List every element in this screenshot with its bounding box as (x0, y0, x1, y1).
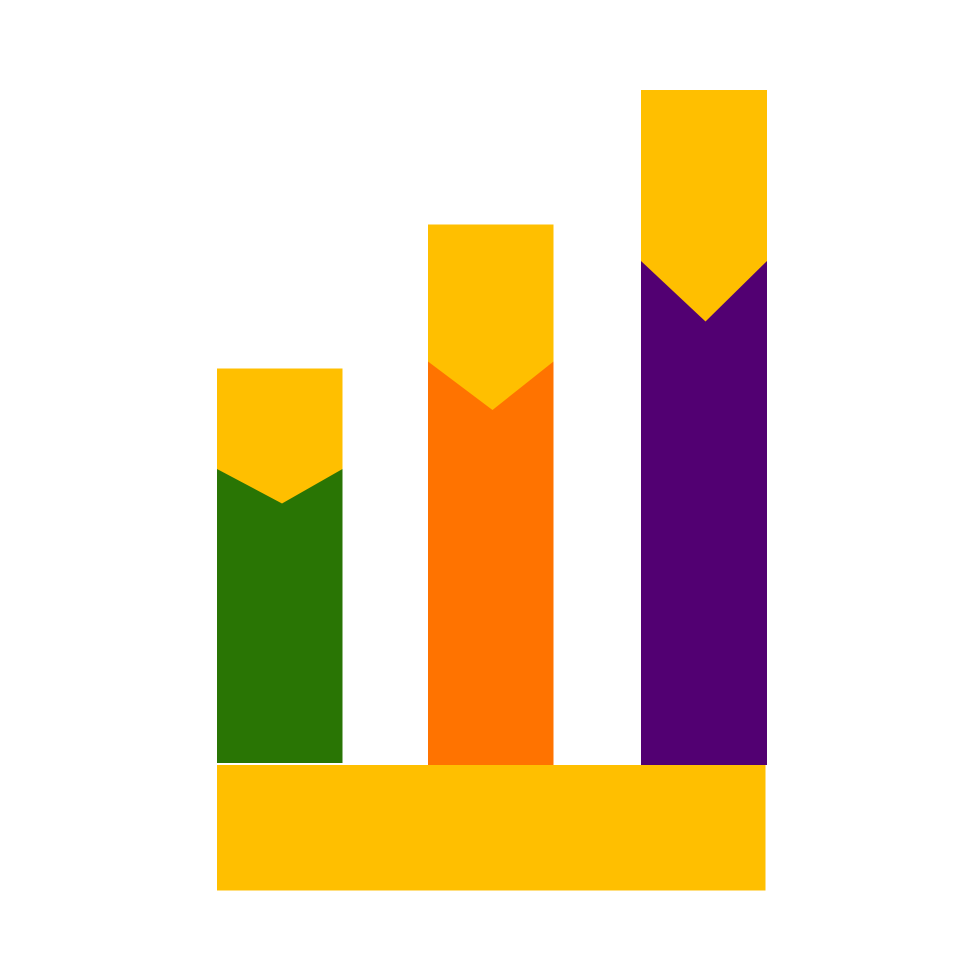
base platform (217, 765, 766, 890)
bar: green (217, 368, 342, 763)
bar: purple (641, 90, 767, 765)
bar: orange (428, 224, 554, 765)
